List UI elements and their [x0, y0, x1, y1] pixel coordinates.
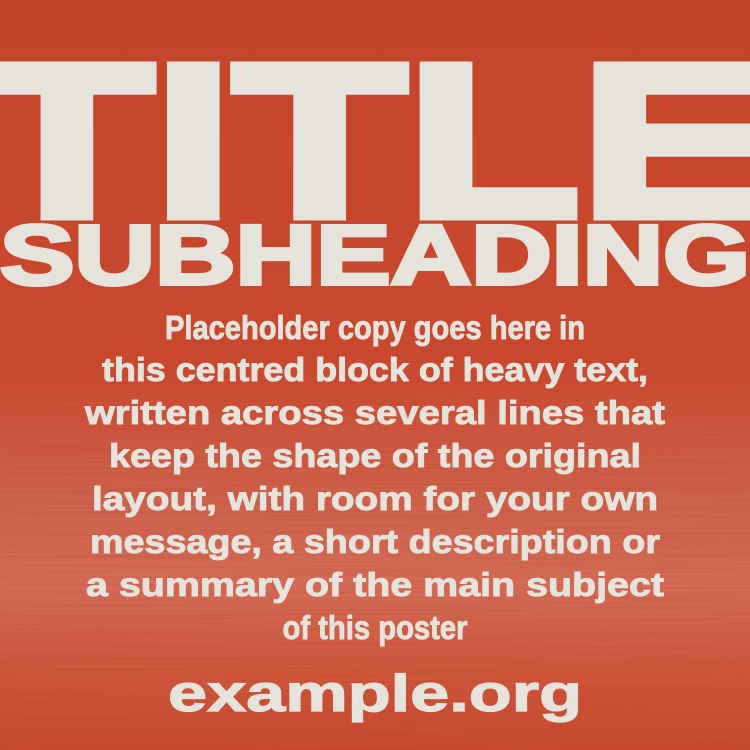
body text: this centred block of heavy text, — [102, 351, 648, 388]
body text: layout, with room for your own — [92, 480, 658, 517]
background — [0, 376, 750, 728]
subtitle: SUBHEADING — [0, 208, 750, 302]
body text: a summary of the main subject — [86, 566, 664, 603]
body text: message, a short description or — [90, 523, 660, 560]
body text: keep the shape of the original — [109, 437, 641, 474]
body text: Placeholder copy goes here in — [165, 309, 585, 346]
body text — [84, 309, 665, 646]
footer site name: example.org — [168, 665, 582, 723]
body text: of this poster — [282, 609, 468, 646]
body text: written across several lines that — [84, 394, 665, 431]
